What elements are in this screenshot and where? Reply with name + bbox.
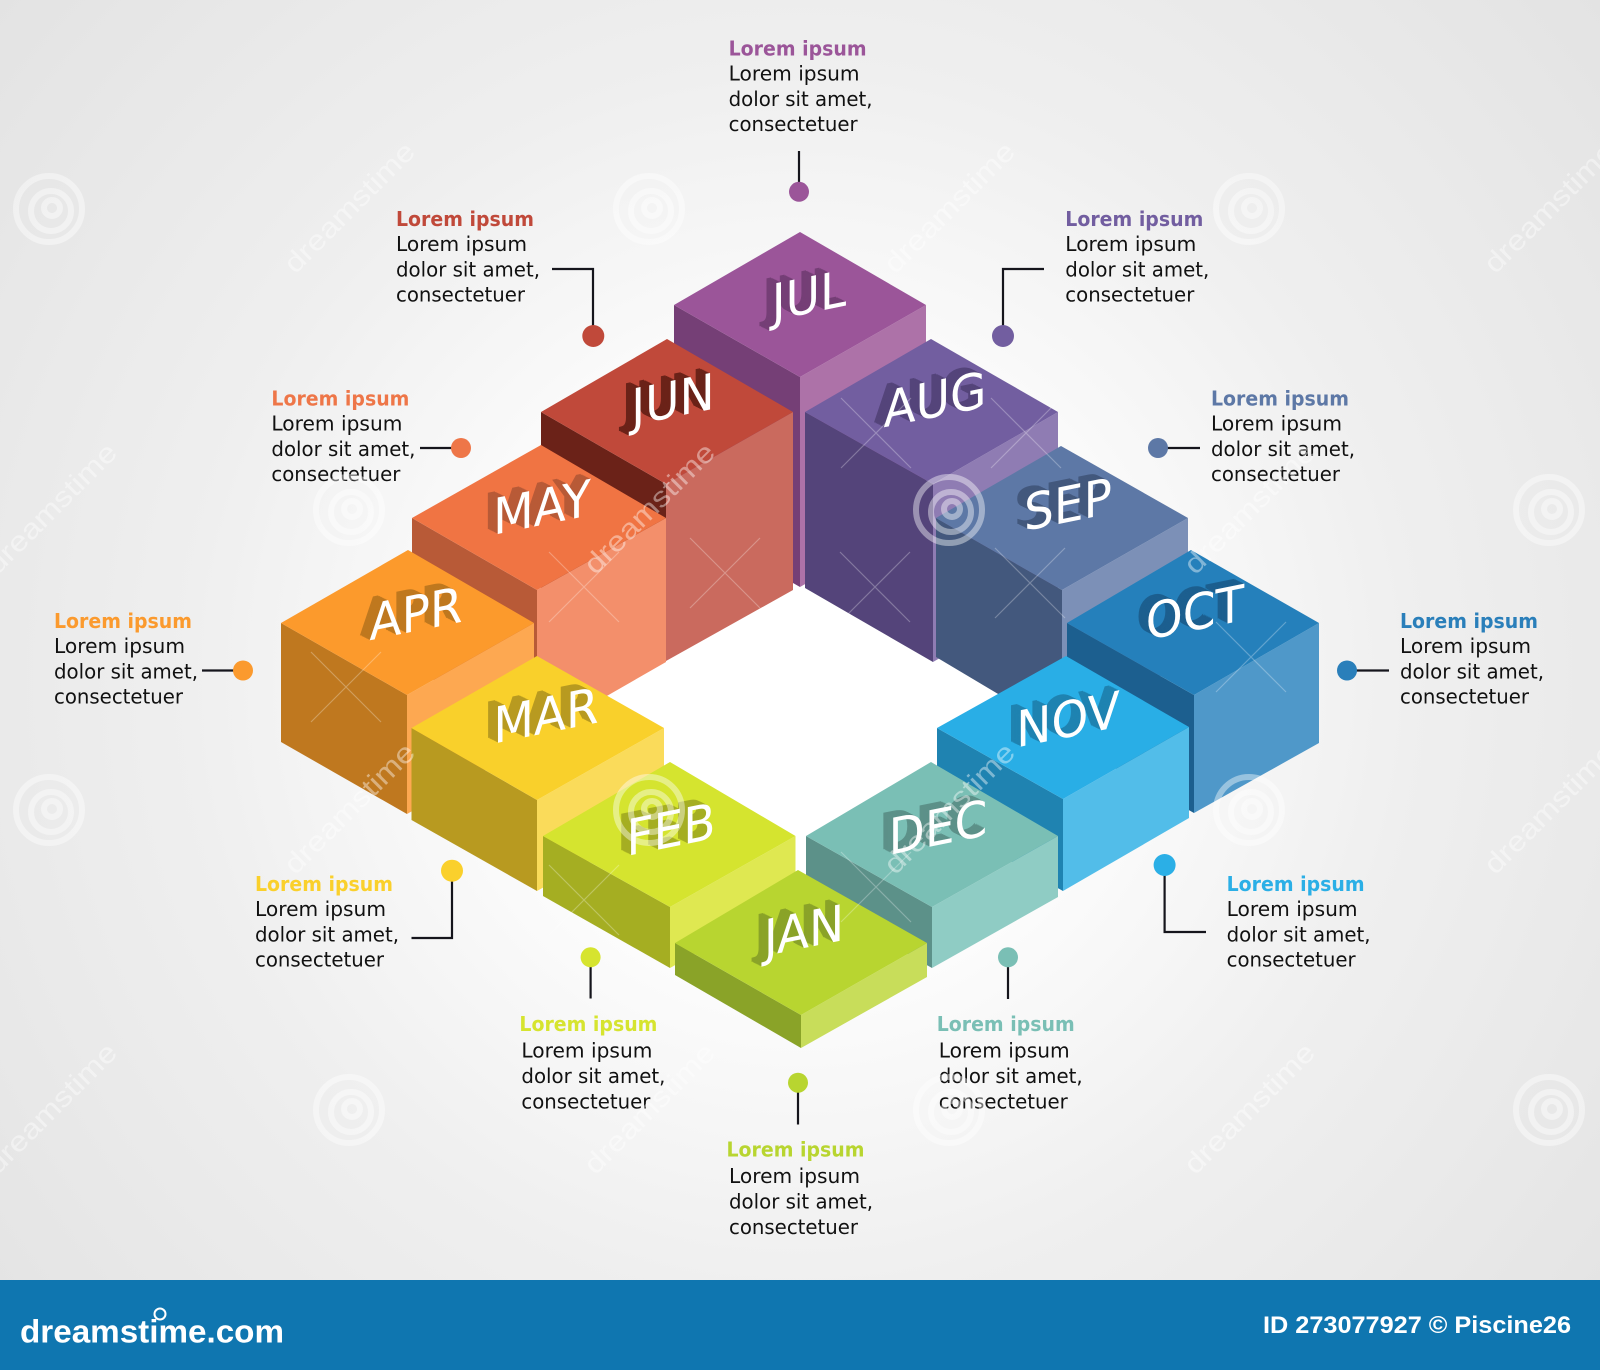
callout text: JUN: Lorem ipsum xyxy=(396,232,527,256)
connector and dot: SEP xyxy=(1148,438,1200,458)
callout text: JUN: dolor sit amet, xyxy=(396,258,540,282)
callout text: AUG: consectetuer xyxy=(1065,282,1195,306)
callout text: FEB xyxy=(519,1012,665,1114)
watermark text: dreamstime xyxy=(578,1037,721,1180)
footer logo: dreamstime.com xyxy=(20,1314,284,1350)
watermark text: dreamstime xyxy=(1478,136,1600,279)
connector and dot: JUN xyxy=(552,269,604,347)
callout text: SEP: dolor sit amet, xyxy=(1211,437,1355,461)
callout text: SEP: Lorem ipsum xyxy=(1211,412,1342,436)
callout text: JAN: Lorem ipsum xyxy=(729,1164,860,1188)
callout text: JUL xyxy=(729,36,873,136)
callout text: JUN: consectetuer xyxy=(396,282,526,306)
callout text: OCT: consectetuer xyxy=(1400,684,1530,708)
callout text: AUG: dolor sit amet, xyxy=(1065,258,1209,282)
block: JUN xyxy=(541,339,793,661)
block: MAR xyxy=(412,656,664,891)
callout text: JUN: Lorem ipsum xyxy=(396,207,534,231)
callout text: NOV: Lorem ipsum xyxy=(1227,897,1358,921)
callout text: SEP: consectetuer xyxy=(1211,462,1341,486)
month label: JUL: JUL xyxy=(771,259,846,333)
callout text: JAN: Lorem ipsum xyxy=(726,1138,864,1162)
block: DEC xyxy=(806,762,1058,968)
callout text: MAY: consectetuer xyxy=(271,462,401,486)
month label: SEP: SEP xyxy=(1024,467,1112,543)
month label: NOV: NOV xyxy=(1016,681,1120,759)
block: JUL xyxy=(674,232,926,587)
callout text: APR: consectetuer xyxy=(54,684,184,708)
callout text: AUG: Lorem ipsum xyxy=(1065,207,1203,231)
watermark text: dreamstime xyxy=(278,136,421,279)
watermark text: dreamstime xyxy=(1178,437,1321,580)
callout text: MAY: dolor sit amet, xyxy=(271,437,415,461)
callout text: DEC: Lorem ipsum xyxy=(939,1038,1070,1062)
callout text: JUN xyxy=(396,207,540,306)
watermark text: dreamstime xyxy=(1178,1037,1321,1180)
callout text: SEP: Lorem ipsum xyxy=(1211,386,1349,410)
block: NOV xyxy=(937,656,1189,891)
watermark text xyxy=(0,136,1600,1180)
month label: JUN: JUN xyxy=(632,363,715,437)
block: JAN xyxy=(675,870,927,1048)
callout text: APR: Lorem ipsum xyxy=(54,609,192,633)
callout text: NOV: Lorem ipsum xyxy=(1227,872,1365,896)
connector and dot: APR xyxy=(202,660,253,680)
callout text: AUG: Lorem ipsum xyxy=(1065,232,1196,256)
callout text: JUL: dolor sit amet, xyxy=(729,87,873,111)
connector and dot: NOV xyxy=(1154,854,1206,932)
callout text: MAY xyxy=(271,386,415,486)
callout text: MAR: dolor sit amet, xyxy=(255,922,399,946)
callout text: FEB: consectetuer xyxy=(521,1090,651,1114)
watermark text: dreamstime xyxy=(878,737,1021,880)
callout text: MAR: Lorem ipsum xyxy=(255,897,386,921)
callout text: MAR xyxy=(255,872,399,972)
connector and dot: AUG xyxy=(992,269,1044,347)
connector and dot: OCT xyxy=(1337,660,1389,680)
month label: DEC: DEC xyxy=(888,789,987,867)
block: AUG xyxy=(805,339,1058,662)
connector and dot: MAY xyxy=(420,438,471,458)
callout text: JAN: consectetuer xyxy=(729,1215,859,1239)
month label: FEB: FEB xyxy=(627,792,715,867)
connector and dot: MAR xyxy=(412,860,463,938)
month label: MAR: MAR xyxy=(494,676,599,755)
watermark swirls xyxy=(16,176,1582,1143)
callout text: DEC: dolor sit amet, xyxy=(939,1064,1083,1088)
watermark text: dreamstime xyxy=(278,737,421,880)
callout text: APR: Lorem ipsum xyxy=(54,634,185,658)
watermark text: dreamstime xyxy=(578,437,721,580)
callout text: JUL: Lorem ipsum xyxy=(729,62,860,86)
callout text: JAN xyxy=(726,1138,873,1239)
month label: APR: APR xyxy=(369,575,462,652)
callout text: NOV xyxy=(1227,872,1371,972)
callout text: DEC: consectetuer xyxy=(939,1090,1068,1114)
connector and dot: FEB xyxy=(581,947,601,998)
callout text: FEB: Lorem ipsum xyxy=(519,1012,657,1036)
connector and dot: JUL xyxy=(789,151,809,202)
callout text: JUL: Lorem ipsum xyxy=(729,36,867,60)
callout text: FEB: Lorem ipsum xyxy=(521,1038,652,1062)
callout text: AUG xyxy=(1065,207,1209,306)
callout text: MAR: consectetuer xyxy=(255,948,385,972)
callout text: JAN: dolor sit amet, xyxy=(729,1190,873,1214)
block: OCT xyxy=(1067,550,1319,813)
block: SEP xyxy=(936,446,1188,732)
callout text: DEC xyxy=(937,1012,1083,1114)
callout text: FEB: dolor sit amet, xyxy=(521,1064,665,1088)
month label: JAN: JAN xyxy=(763,893,844,968)
connector and dot: DEC xyxy=(998,947,1018,999)
callout text: SEP xyxy=(1211,386,1355,486)
callout text: OCT: dolor sit amet, xyxy=(1400,660,1544,684)
watermark text: dreamstime xyxy=(878,136,1021,279)
watermark text: dreamstime xyxy=(1478,737,1600,880)
callout text: DEC: Lorem ipsum xyxy=(937,1012,1075,1036)
callout text: OCT xyxy=(1400,609,1544,708)
callout text: NOV: consectetuer xyxy=(1227,948,1356,972)
block: MAY xyxy=(412,445,666,736)
callout text: JUL: consectetuer xyxy=(729,112,858,136)
callout text: OCT: Lorem ipsum xyxy=(1400,609,1538,633)
callout text: APR: dolor sit amet, xyxy=(54,660,198,684)
connector and dot: JAN xyxy=(788,1073,808,1124)
month label: OCT: OCT xyxy=(1146,574,1244,652)
month label: AUG: AUG xyxy=(884,361,986,439)
callout text: MAY: Lorem ipsum xyxy=(271,412,402,436)
block: FEB xyxy=(543,762,796,968)
callout text: APR xyxy=(54,609,198,708)
callout text: MAY: Lorem ipsum xyxy=(271,386,409,410)
callout text: NOV: dolor sit amet, xyxy=(1227,922,1371,946)
block: APR xyxy=(281,550,534,814)
month label: MAY: MAY xyxy=(493,469,591,547)
footer bar xyxy=(0,1280,1600,1370)
callout text: MAR: Lorem ipsum xyxy=(255,872,393,896)
callout text: OCT: Lorem ipsum xyxy=(1400,634,1531,658)
footer image id and credit: ID 273077927 © Piscine26 xyxy=(1263,1312,1571,1339)
